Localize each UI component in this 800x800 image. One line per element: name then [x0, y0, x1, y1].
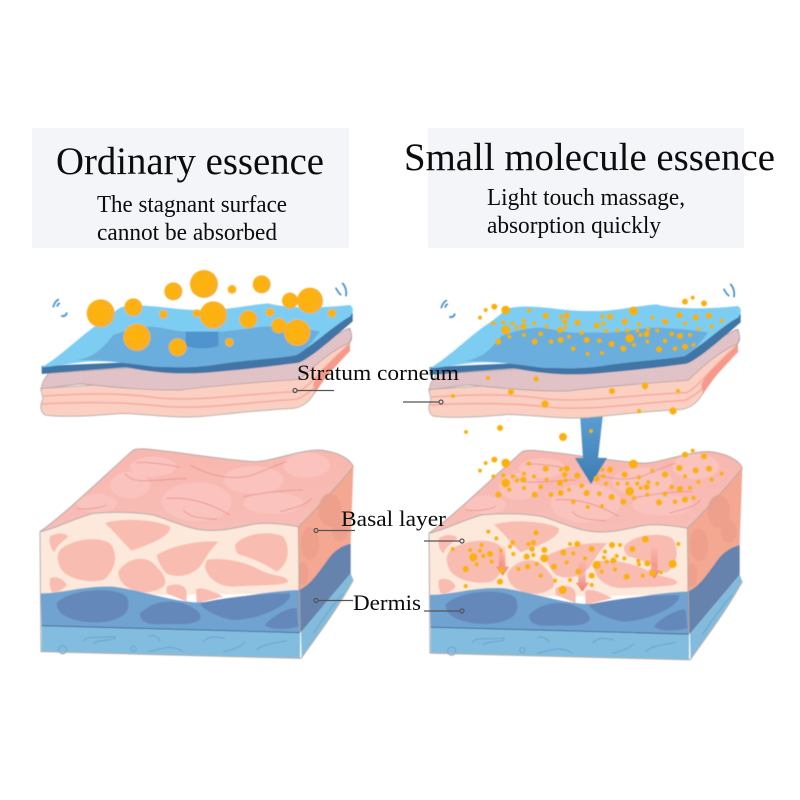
- dots: absorbed essence: [451, 530, 680, 594]
- text: ordinary essence description: cannot be absorbed: [97, 220, 277, 246]
- text: ordinary essence description: The stagnant surface: [97, 192, 287, 218]
- icon: large essence droplets: [87, 270, 336, 356]
- panel: ordinary essence heading: [32, 128, 349, 248]
- arrow: red downward arrows: [496, 547, 661, 592]
- text: small molecule description: absorption quickly: [487, 213, 661, 239]
- dots: fine essence on lower top face: [478, 449, 724, 509]
- skin sheet: small molecule upper layers: [429, 284, 741, 418]
- label: dermis: Dermis: [353, 590, 421, 615]
- title: small molecule essence: Small molecule essence: [404, 136, 775, 179]
- skin block: ordinary essence lower layers: [40, 449, 353, 658]
- text: ordinary essence description: [97, 192, 287, 246]
- label: stratum corneum: Stratum corneum: [297, 360, 460, 385]
- skin block: small molecule lower layers: [429, 450, 742, 660]
- label: basal layer: Basal layer: [341, 506, 447, 531]
- leader lines: layer callouts: [293, 388, 464, 613]
- text: small molecule description: [487, 185, 685, 239]
- arrow: large blue downward arrow: [575, 414, 607, 484]
- panel: small molecule essence heading: [404, 128, 775, 248]
- skin sheet: ordinary essence upper layers: [41, 270, 353, 417]
- dots: fine essence on upper sheet: [478, 296, 724, 356]
- dots: essence passing through upper sheet: [451, 376, 680, 441]
- text: small molecule description: Light touch massage,: [487, 185, 685, 211]
- basal layer detail: small red arrows and absorbed dots: [451, 530, 680, 594]
- title: ordinary essence: Ordinary essence: [56, 140, 324, 183]
